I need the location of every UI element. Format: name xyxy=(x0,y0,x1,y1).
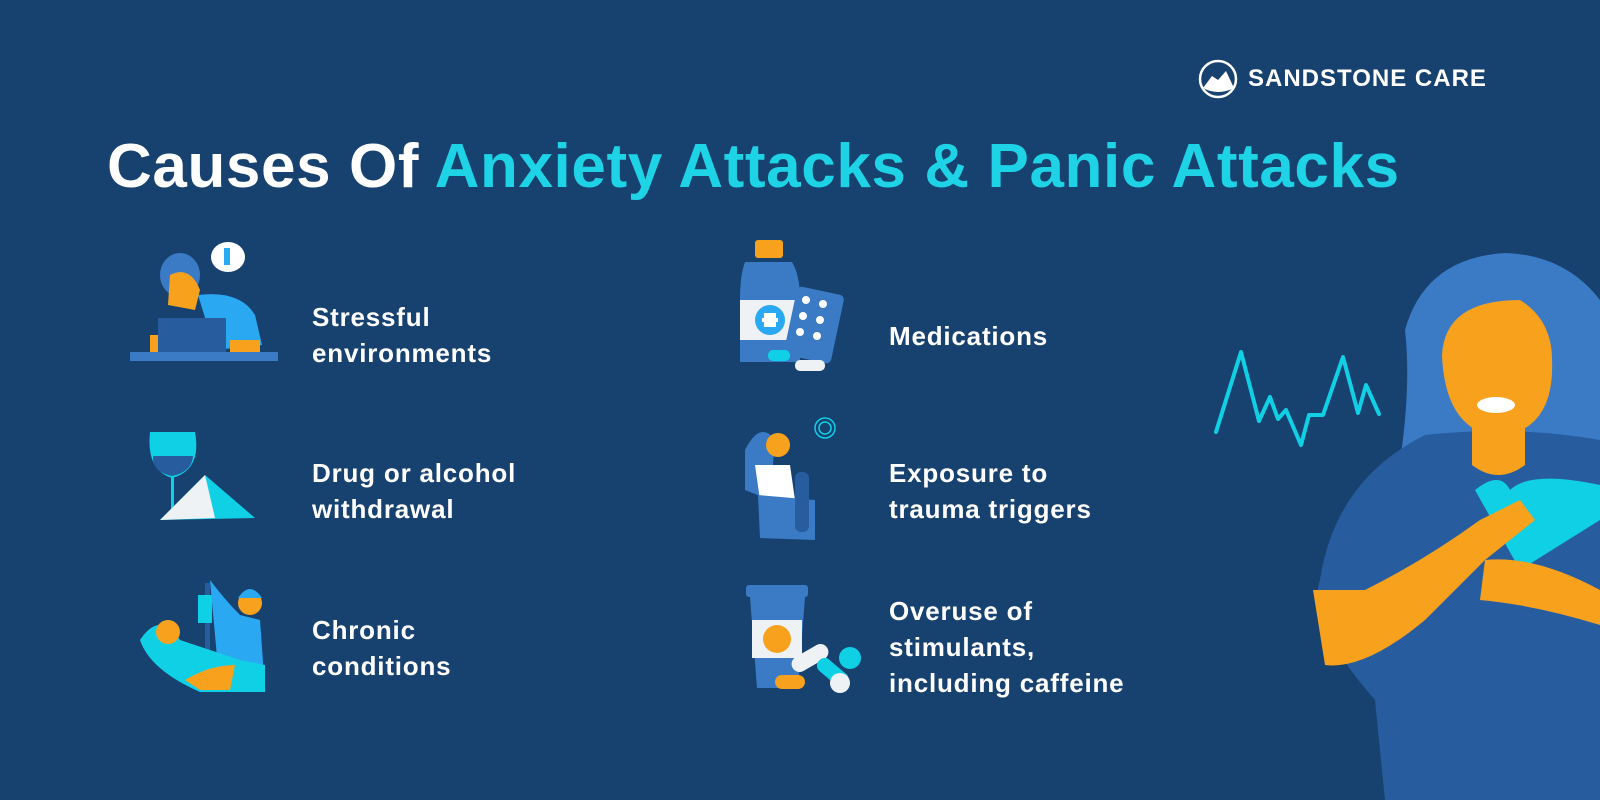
icon: medication bottle and pills xyxy=(740,240,845,371)
title: Causes Of Anxiety Attacks & Panic Attacks xyxy=(107,132,1400,201)
logo icon xyxy=(1200,61,1236,97)
icon: wine glass and powder xyxy=(149,432,255,520)
label: stressful environments: environments xyxy=(312,338,492,368)
label: medications: Medications xyxy=(889,321,1048,351)
label: stressful environments xyxy=(312,302,492,368)
label: stimulants: stimulants, xyxy=(889,632,1035,662)
label: chronic conditions: Chronic xyxy=(312,615,416,645)
label: trauma triggers xyxy=(889,458,1092,524)
label: trauma triggers: Exposure to xyxy=(889,458,1048,488)
illustration: woman with heart xyxy=(1313,253,1600,800)
label: chronic conditions: conditions xyxy=(312,651,451,681)
label: stressful environments: Stressful xyxy=(312,302,430,332)
heartbeat line xyxy=(1216,352,1379,445)
label: drug or alcohol withdrawal: Drug or alcohol xyxy=(312,458,516,488)
logo text: SANDSTONE CARE xyxy=(1248,65,1487,92)
label: chronic conditions xyxy=(312,615,451,681)
label: drug or alcohol withdrawal: withdrawal xyxy=(312,494,454,524)
icon: patient and doctor xyxy=(140,580,265,692)
label: trauma triggers: trauma triggers xyxy=(889,494,1092,524)
label: stimulants xyxy=(889,596,1124,698)
icon: person hugging knees xyxy=(745,418,835,540)
label: stimulants: including caffeine xyxy=(889,668,1124,698)
icon: stressed person at laptop xyxy=(130,242,278,361)
icon: coffee cup and pills xyxy=(746,585,861,693)
label: stimulants: Overuse of xyxy=(889,596,1033,626)
label: drug or alcohol withdrawal xyxy=(312,458,516,524)
